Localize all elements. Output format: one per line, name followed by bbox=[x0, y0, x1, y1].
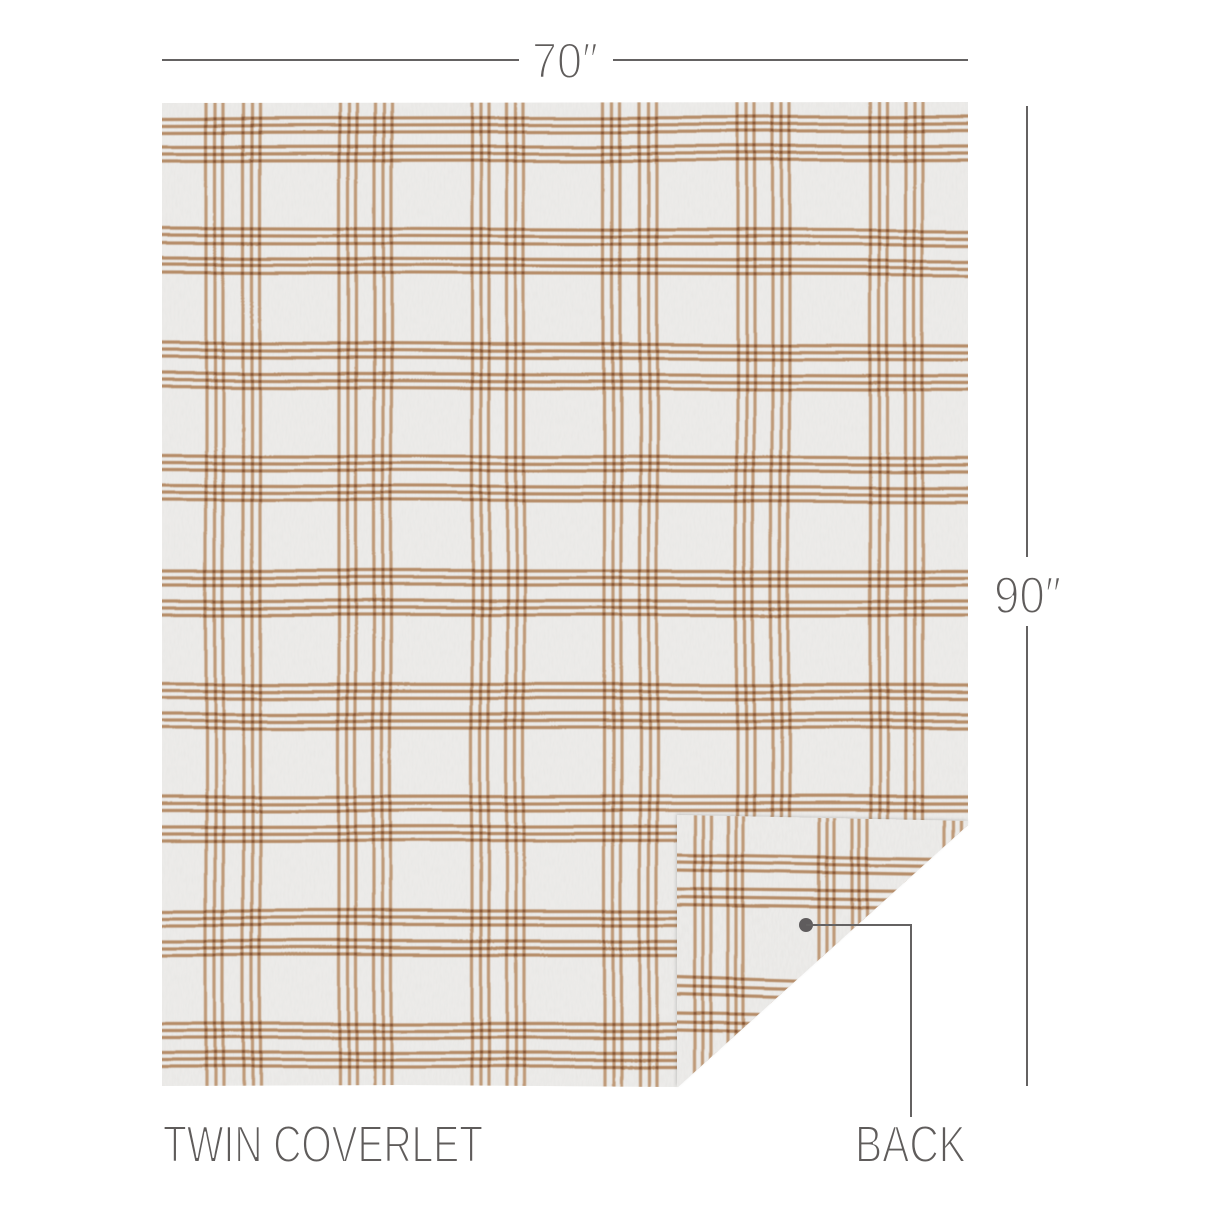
folded corner showing back of coverlet bbox=[675, 812, 968, 1090]
coverlet front: plaid fabric bbox=[156, 98, 974, 1090]
label: twin coverlet: TWIN COVERLET bbox=[163, 1116, 483, 1174]
callout: pointer to back of coverlet bbox=[799, 918, 911, 1117]
dimension: width 70 inches: 70″ bbox=[532, 33, 598, 89]
label: back: BACK bbox=[855, 1116, 966, 1174]
dimension: height 90 inches: 90″ bbox=[994, 567, 1061, 625]
